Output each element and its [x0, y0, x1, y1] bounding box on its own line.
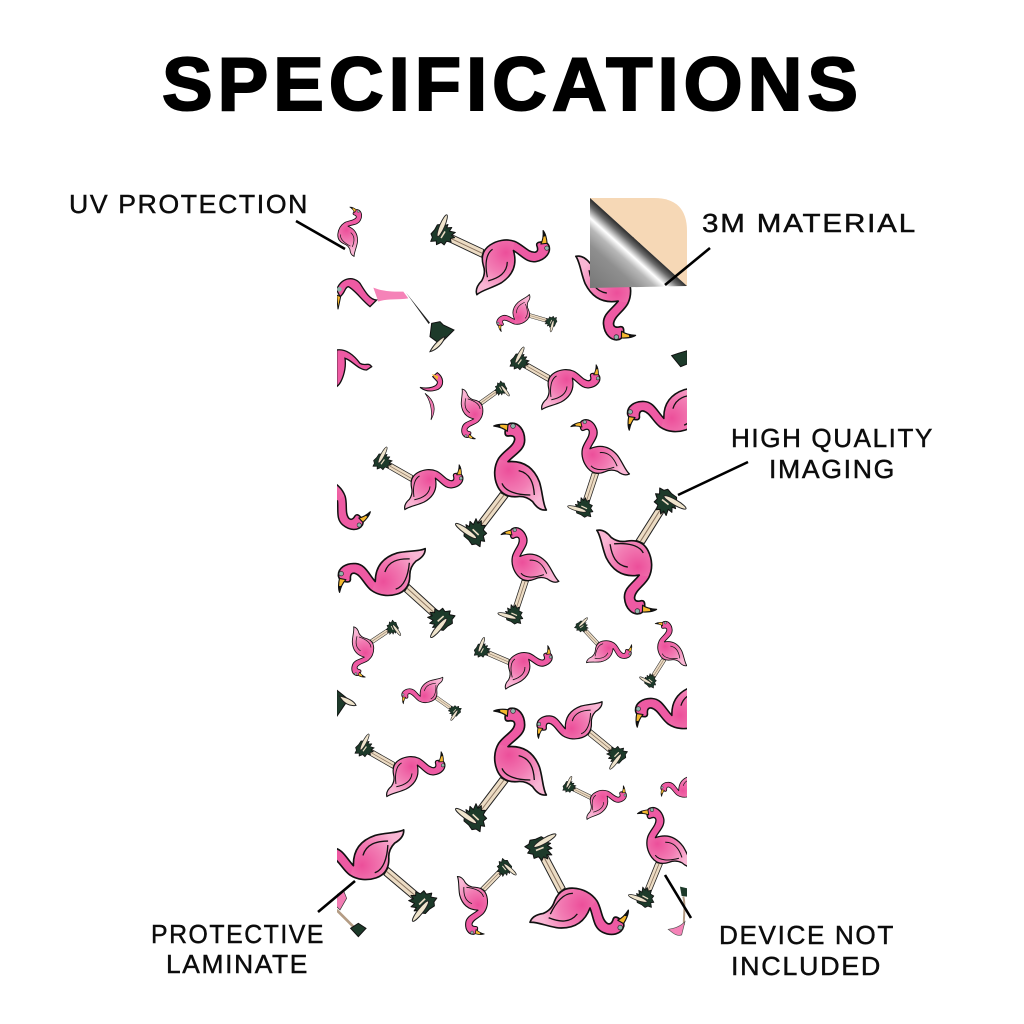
flamingo: under peeled corner	[574, 237, 640, 341]
flamingo: small right upright	[639, 620, 687, 688]
flamingo: center tall	[454, 423, 546, 547]
callout: protective laminate	[151, 881, 355, 979]
callout: high quality imaging: IMAGING	[769, 454, 896, 484]
flamingo: bottom left large	[337, 829, 438, 922]
flamingo: lower right of center	[535, 699, 629, 771]
callout: device not included: INCLUDED	[731, 951, 882, 981]
callout: high quality imaging	[678, 423, 934, 495]
callout: device not included	[665, 875, 895, 981]
flamingo: right edge upper	[626, 388, 687, 432]
flamingo: small upper middle	[496, 294, 558, 332]
flamingo: center upright	[498, 527, 560, 624]
callout: 3M material: 3M MATERIAL	[702, 208, 917, 238]
flamingo: small right edge	[660, 776, 687, 798]
flamingo: bottom inverted	[456, 858, 517, 935]
callout: high quality imaging: HIGH QUALITY	[731, 423, 934, 453]
flamingo: left edge clipped	[337, 484, 371, 530]
flamingo: left middle	[372, 446, 464, 510]
flamingo: small right	[574, 617, 632, 664]
flamingo: lower left	[354, 734, 446, 798]
flamingo: bottom right upright	[628, 806, 687, 908]
flamingo fragments: erased upper left	[337, 279, 687, 420]
flamingo: large left	[338, 548, 456, 638]
callout: protective laminate: PROTECTIVE	[151, 919, 325, 949]
flamingo: small lower right	[562, 776, 627, 820]
icon: 3M material corner peel	[590, 198, 687, 288]
flamingo fragments: lower edges	[337, 690, 687, 937]
callout: UV protection: UV PROTECTION	[69, 189, 309, 219]
flamingo: upper right	[510, 346, 600, 410]
flamingo: top large	[430, 214, 550, 296]
flamingo: bottom large	[524, 833, 629, 936]
title: SPECIFICATIONS	[162, 42, 863, 126]
callout: protective laminate: LAMINATE	[166, 949, 309, 979]
flamingo: small left low	[401, 677, 462, 723]
flamingo: upright right of center	[567, 419, 630, 518]
flamingo: large inverted right	[596, 488, 687, 615]
flamingo: small inverted	[460, 380, 510, 440]
flamingo: top left partial	[337, 206, 362, 257]
flamingo: small inverted left	[351, 620, 402, 678]
flamingo: lower center small	[474, 637, 553, 690]
flamingo: right edge lower	[634, 688, 687, 730]
panel: device skin pattern	[337, 206, 687, 938]
flamingo: lower center tall	[454, 708, 546, 832]
callout: 3M material	[665, 208, 917, 285]
callout: UV protection	[69, 189, 345, 249]
callout: device not included: DEVICE NOT	[719, 920, 895, 950]
